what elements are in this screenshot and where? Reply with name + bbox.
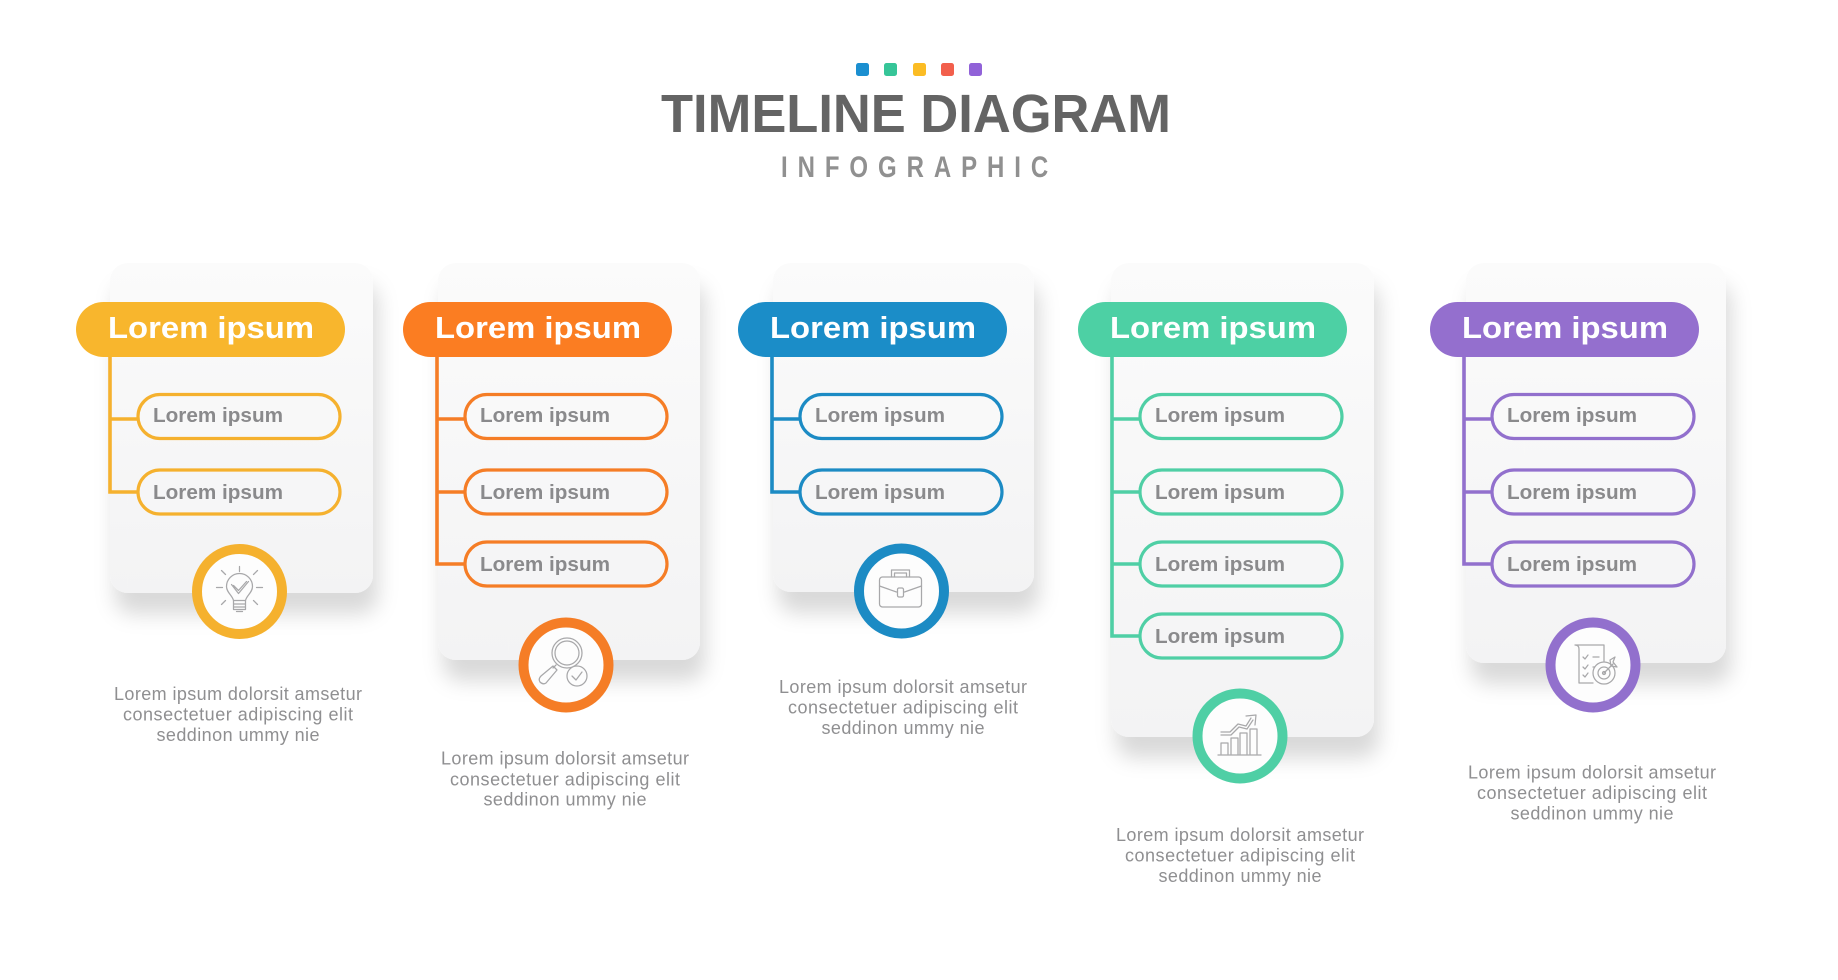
header: title block: [661, 63, 1171, 184]
description: seddinon ummy nie: [1510, 804, 1674, 824]
card: [438, 263, 700, 660]
item 1: Lorem ipsum: [1507, 405, 1637, 427]
icon: growth chart: [1198, 694, 1282, 778]
panel: column 1 yellow: [76, 263, 373, 745]
item 4: [1140, 614, 1342, 658]
panel: column 5 purple: [1430, 263, 1726, 824]
item 1: [1140, 394, 1342, 438]
item 3: [1492, 542, 1694, 586]
card: [773, 263, 1034, 592]
item 4: Lorem ipsum: [1155, 626, 1285, 648]
description: [1116, 825, 1364, 886]
connector lines: [1112, 350, 1140, 636]
heading pill: [1430, 302, 1699, 357]
item 3: [465, 542, 667, 586]
item 1: Lorem ipsum: [815, 405, 945, 427]
description: [441, 749, 689, 810]
connector lines: [437, 350, 465, 564]
heading pill: Lorem ipsum: [1110, 310, 1316, 345]
connector lines: [1464, 350, 1492, 564]
item 1: [1492, 394, 1694, 438]
item 3: Lorem ipsum: [1155, 554, 1285, 576]
card: [1466, 263, 1726, 663]
description: Lorem ipsum dolorsit amsetur: [1468, 762, 1716, 782]
item 1: Lorem ipsum: [480, 405, 610, 427]
item 2: Lorem ipsum: [153, 482, 283, 504]
heading pill: [1078, 302, 1347, 357]
item 3: Lorem ipsum: [480, 554, 610, 576]
item 2: Lorem ipsum: [1507, 482, 1637, 504]
item 2: Lorem ipsum: [1155, 482, 1285, 504]
item 2: [1140, 470, 1342, 514]
item 3: Lorem ipsum: [1507, 554, 1637, 576]
heading pill: Lorem ipsum: [435, 310, 641, 345]
panel: column 2 orange: [403, 263, 700, 810]
description: Lorem ipsum dolorsit amsetur: [441, 749, 689, 769]
colour dots: [856, 63, 982, 76]
card: [110, 263, 373, 593]
description: consectetuer adipiscing elit: [450, 769, 680, 789]
heading pill: Lorem ipsum: [770, 310, 976, 345]
heading pill: [76, 302, 345, 357]
icon: magnifier with check: [524, 622, 608, 708]
description: consectetuer adipiscing elit: [1477, 783, 1707, 803]
connector lines: [772, 350, 800, 492]
description: consectetuer adipiscing elit: [1125, 846, 1355, 866]
description: [114, 684, 362, 745]
item 2: Lorem ipsum: [480, 482, 610, 504]
subtitle: INFOGRAPHIC: [781, 149, 1048, 184]
title: TIMELINE DIAGRAM: [661, 84, 1171, 144]
description: seddinon ummy nie: [1158, 866, 1322, 886]
card: [1111, 263, 1374, 737]
icon: briefcase: [859, 548, 944, 634]
connector lines: [110, 350, 138, 492]
description: seddinon ummy nie: [156, 725, 320, 745]
item 2: [1492, 470, 1694, 514]
heading pill: Lorem ipsum: [1462, 310, 1668, 345]
item 1: Lorem ipsum: [153, 405, 283, 427]
item 2: [465, 470, 667, 514]
item 2: [138, 470, 340, 514]
icon: checklist with target: [1550, 622, 1636, 708]
item 2: Lorem ipsum: [815, 482, 945, 504]
item 1: [465, 394, 667, 438]
description: Lorem ipsum dolorsit amsetur: [779, 677, 1027, 697]
item 1: Lorem ipsum: [1155, 405, 1285, 427]
item 2: [800, 470, 1002, 514]
description: [1468, 762, 1716, 824]
item 3: [1140, 542, 1342, 586]
icon: light bulb: [197, 549, 282, 634]
panel: column 3 blue: [738, 263, 1034, 738]
description: consectetuer adipiscing elit: [788, 698, 1018, 718]
description: Lorem ipsum dolorsit amsetur: [1116, 825, 1364, 845]
panel: column 4 green: [1078, 263, 1374, 886]
heading pill: [403, 302, 672, 357]
item 1: [800, 394, 1002, 438]
description: seddinon ummy nie: [822, 718, 984, 738]
description: seddinon ummy nie: [484, 790, 646, 810]
description: consectetuer adipiscing elit: [123, 705, 353, 725]
item 1: [138, 394, 340, 438]
description: Lorem ipsum dolorsit amsetur: [114, 684, 362, 704]
heading pill: [738, 302, 1007, 357]
heading pill: Lorem ipsum: [108, 310, 314, 345]
description: [779, 677, 1027, 738]
